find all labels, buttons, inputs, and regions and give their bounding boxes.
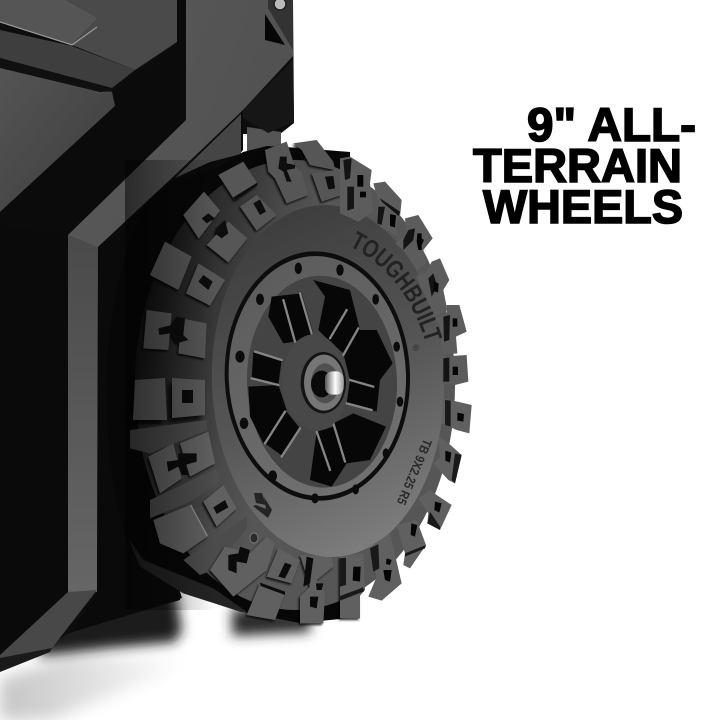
lower right lug holes <box>353 413 464 582</box>
axle <box>311 371 332 397</box>
body: upper-left panel <box>0 64 115 212</box>
body: recess behind wheel <box>72 112 243 632</box>
outer dark shoulder of the tire <box>106 146 350 623</box>
tread lugs: lower right <box>340 398 472 618</box>
tread lug hole: middle left <box>182 390 193 403</box>
small valve <box>250 533 258 543</box>
body: handle side face <box>66 0 177 70</box>
tread strips <box>130 420 207 453</box>
hub <box>280 333 350 433</box>
body: strip under band <box>173 114 241 180</box>
title: TERRAIN <box>473 139 682 192</box>
sidewall <box>206 201 450 561</box>
body: vertical band shading <box>68 235 98 592</box>
icon: brand logo <box>253 493 272 518</box>
rim opening <box>243 273 401 490</box>
body: top right notch <box>265 14 285 45</box>
body: foot <box>0 590 97 670</box>
icon: screw <box>274 0 286 10</box>
body: base fill <box>0 0 294 670</box>
rim ring <box>225 253 410 499</box>
title: 9" ALL- <box>527 98 696 151</box>
axle bolt <box>325 371 344 395</box>
tread lugs: lower left <box>128 420 360 623</box>
title: WHEELS <box>483 180 683 233</box>
lower right lug shading <box>340 400 462 601</box>
tread lugs: upper left <box>143 140 342 358</box>
hub ring <box>301 352 346 413</box>
wheel <box>125 140 472 627</box>
dark outer tread ridge <box>128 538 300 623</box>
upper right lug holes <box>357 175 458 375</box>
lower left lug recesses <box>167 453 360 608</box>
title <box>473 98 696 233</box>
body: diagonal gray band <box>68 0 293 592</box>
toolbox body <box>0 0 294 672</box>
lug edge highlight <box>191 505 207 536</box>
left side tread shading <box>125 160 215 610</box>
body: right dark corner <box>243 60 294 133</box>
rim bolt holes <box>235 263 403 503</box>
upper right lug shading <box>343 158 450 382</box>
brand text on sidewall: TOUGHBUILT <box>353 231 442 339</box>
body: lower left black panel <box>0 226 68 655</box>
upper left lug recesses <box>158 157 335 343</box>
body: handle shadow <box>0 58 116 92</box>
body: black recess <box>0 0 186 235</box>
rim <box>220 248 414 504</box>
trademark mark: ® <box>413 343 420 353</box>
size text: TB 9X2.25 R5 <box>394 437 435 507</box>
floor shadow <box>0 590 310 720</box>
tread lugs: upper right <box>340 157 468 385</box>
tread lugs: middle left <box>133 378 205 420</box>
rim outer black edge <box>220 248 414 504</box>
body: handle top face <box>0 0 98 45</box>
tire body <box>135 160 455 610</box>
rim dark windows <box>248 280 393 487</box>
body: handle lower face <box>0 30 135 88</box>
rim spokes <box>252 293 373 470</box>
